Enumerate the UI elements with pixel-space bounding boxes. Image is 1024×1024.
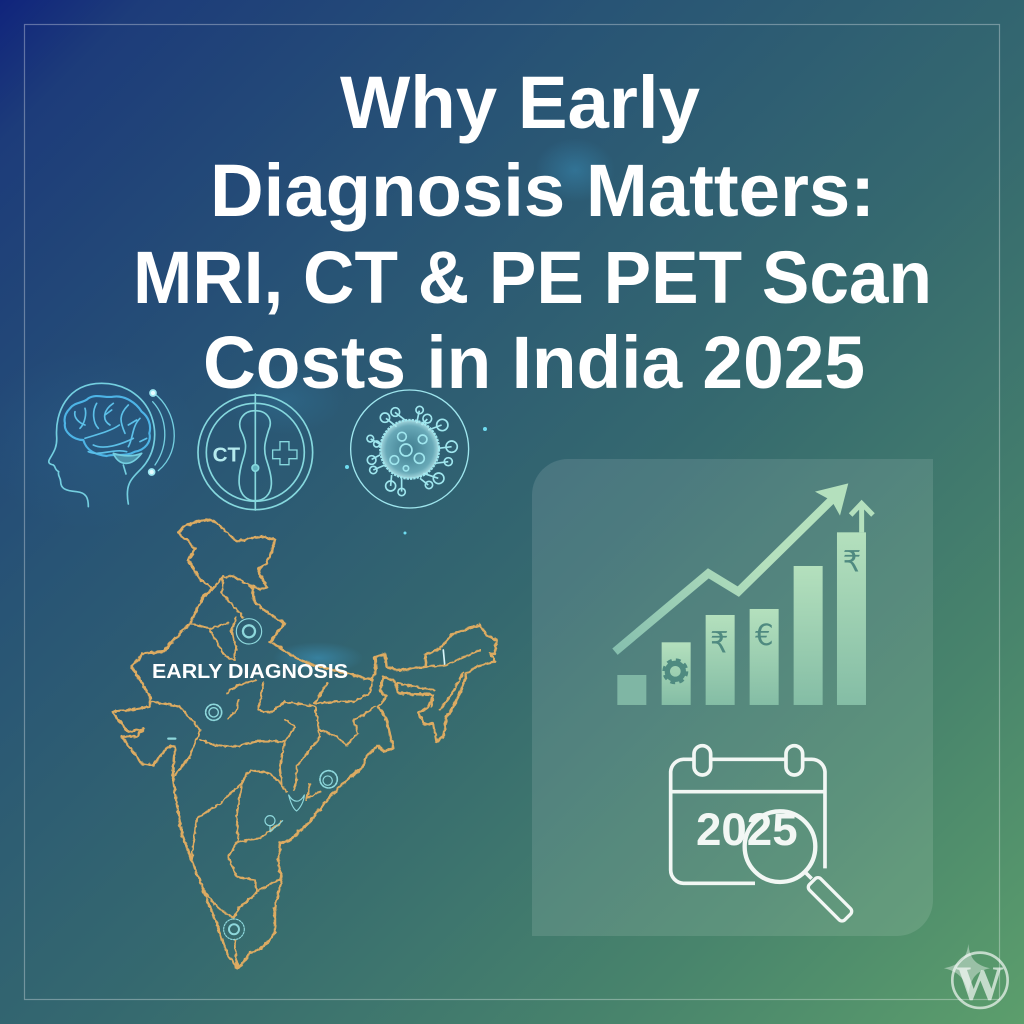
icon: calendar 2025 with magnifier	[671, 746, 853, 923]
icon: virus cell	[351, 390, 469, 508]
trend arrow	[615, 483, 848, 652]
icon: brain MRI head	[49, 383, 174, 507]
map: India outline	[113, 519, 497, 968]
panel: cost trend and calendar	[532, 459, 933, 936]
title: MRI, CT & PE PET Scan	[133, 236, 932, 319]
icon: WordPress watermark	[944, 944, 1008, 1010]
icon: WordPress watermark: W	[956, 957, 1004, 1010]
rupee symbols: ₹	[843, 545, 861, 579]
sparkles around virus	[345, 427, 487, 534]
bar chart: rising costs	[615, 483, 873, 705]
rupee symbols: ₹	[710, 626, 729, 660]
map markers	[168, 619, 445, 940]
title: Diagnosis Matters:	[210, 149, 875, 232]
rupee symbols	[710, 545, 861, 660]
icon: gear	[664, 660, 686, 682]
small up arrow	[851, 503, 873, 532]
icon: CT scanner	[198, 394, 313, 510]
title: Why Early	[340, 61, 700, 144]
map label: EARLY DIAGNOSIS	[152, 660, 348, 683]
title	[133, 61, 932, 404]
rupee symbols: €	[755, 618, 774, 652]
title: Costs in India 2025	[203, 321, 865, 404]
icon: CT scanner: CT	[213, 444, 241, 467]
icon: calendar 2025 with magnifier: 2025	[696, 804, 798, 855]
